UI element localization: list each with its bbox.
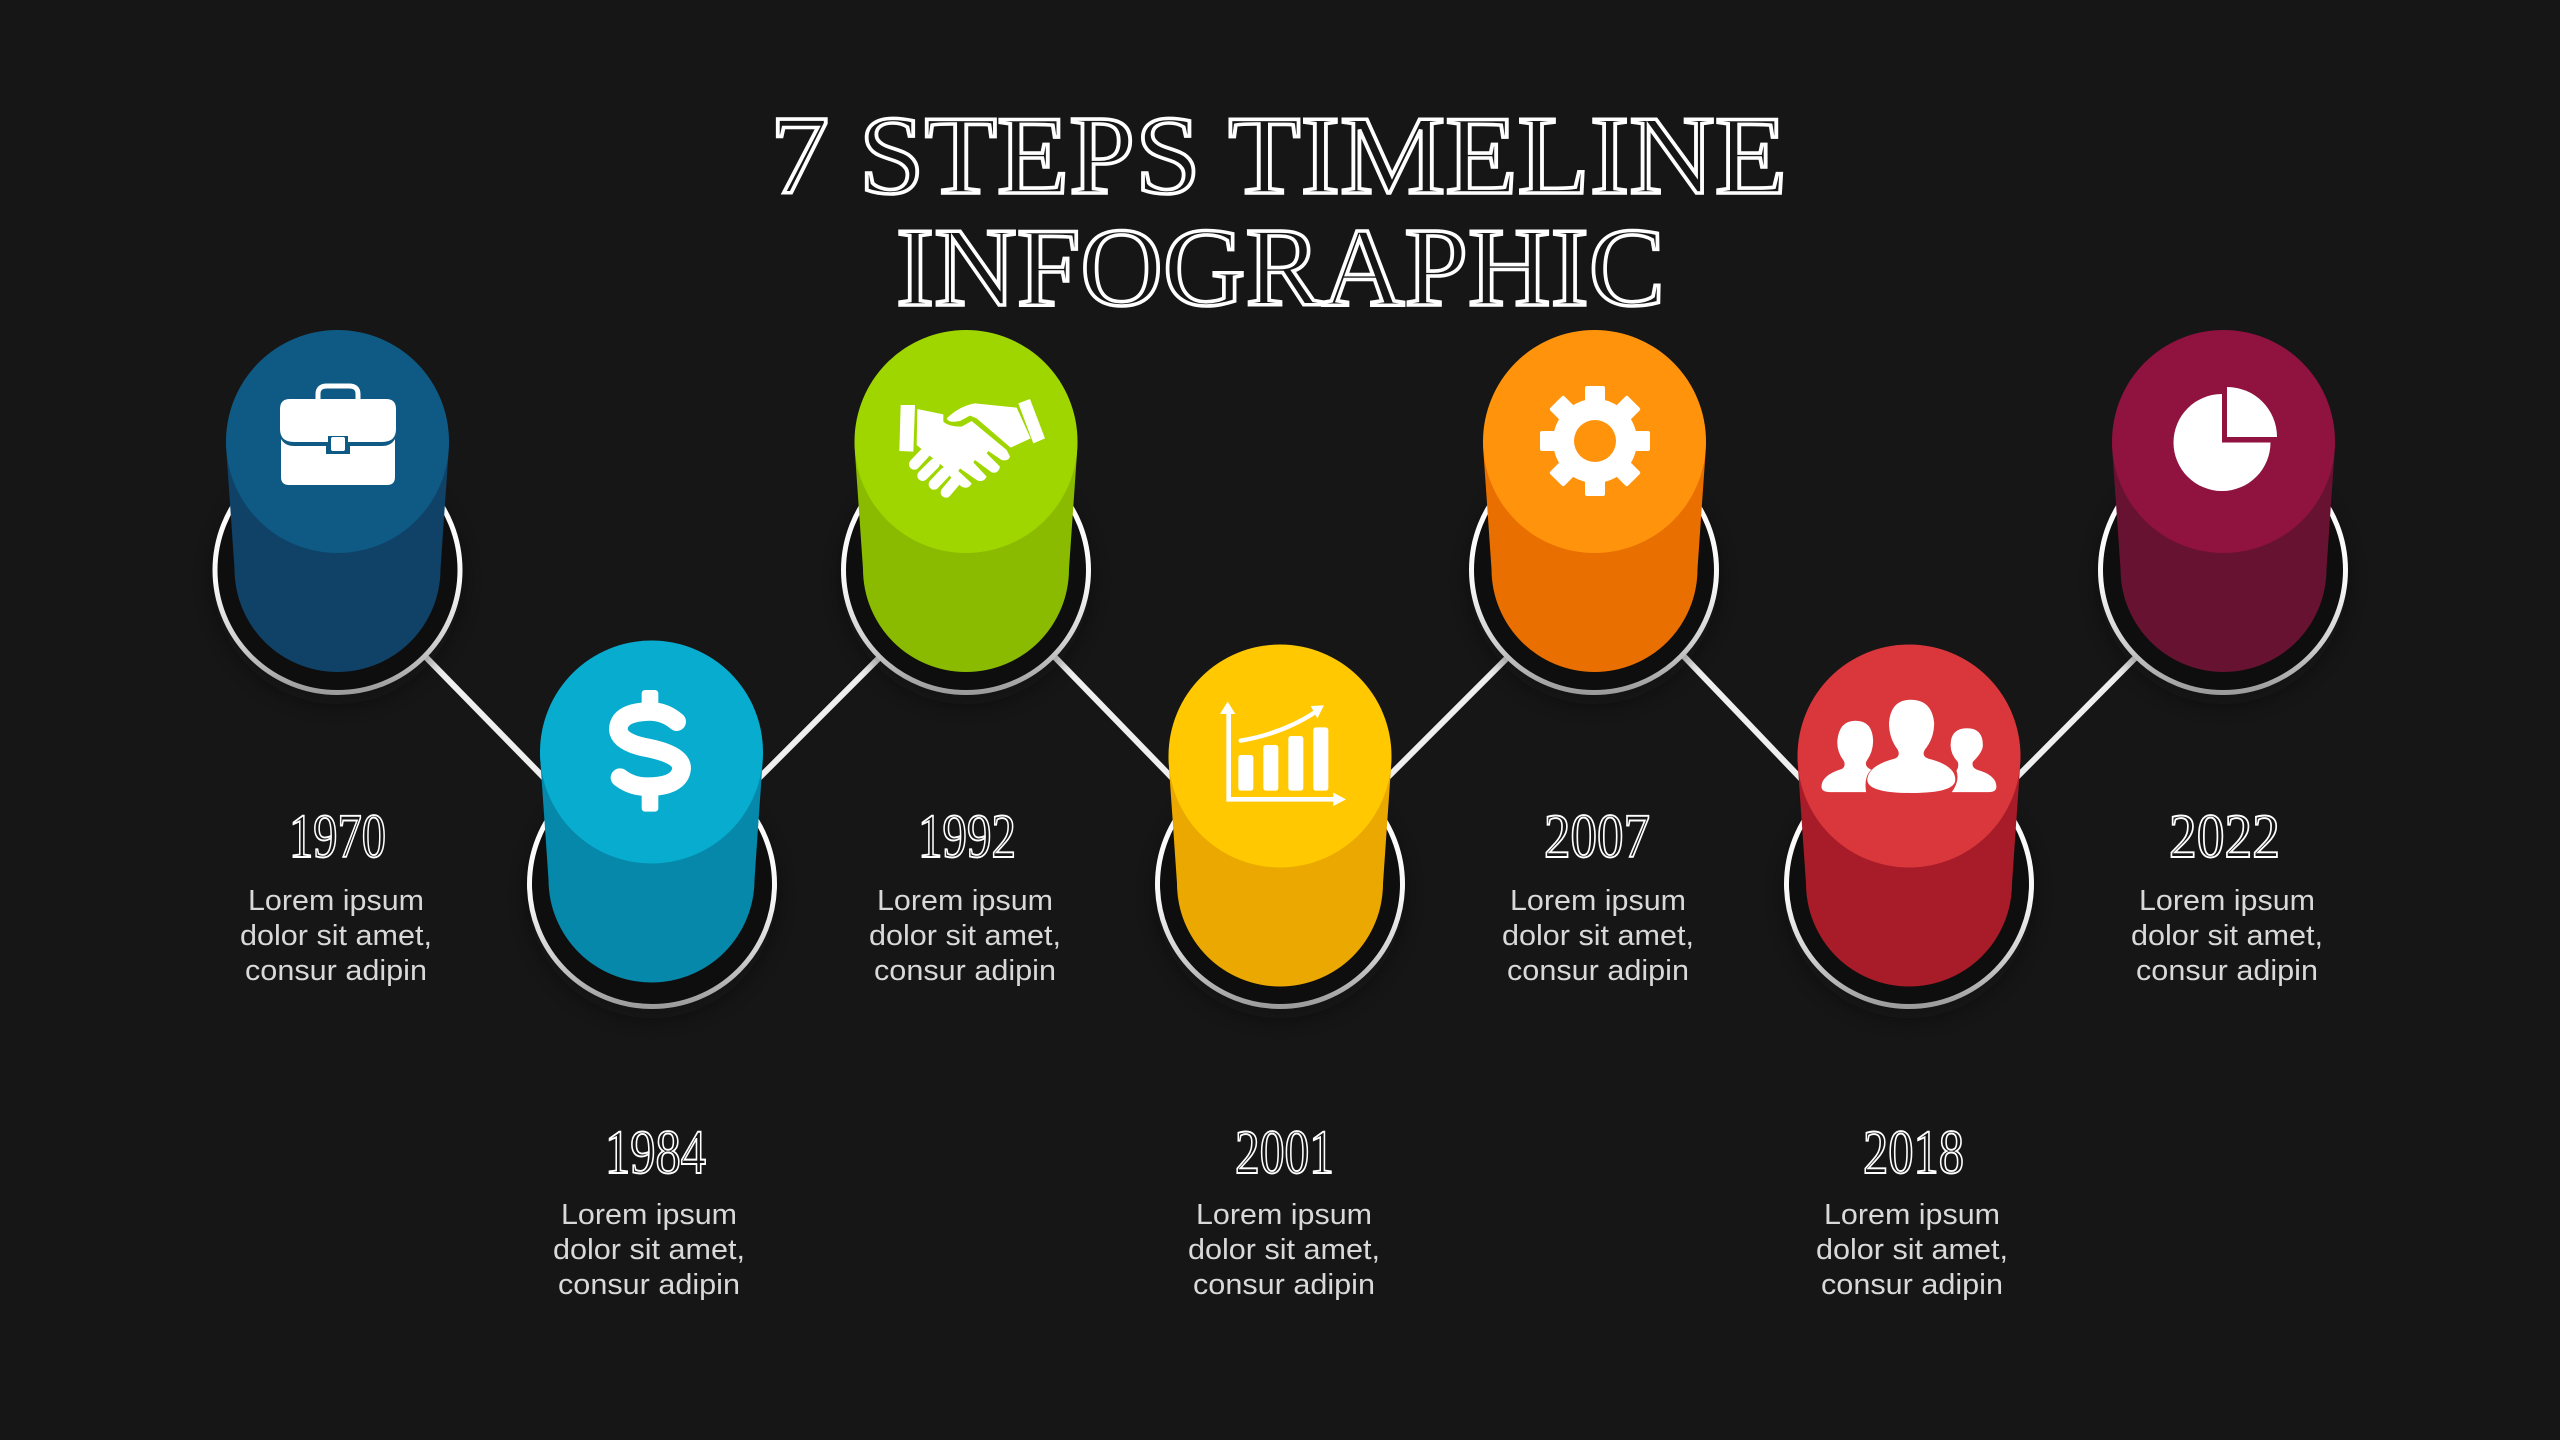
cylinder cap 2	[540, 640, 763, 864]
icon: pie chart	[2173, 387, 2277, 491]
year 1970: 1970	[289, 803, 386, 871]
year 1984: 1984	[605, 1119, 706, 1187]
description 7	[2131, 885, 2323, 987]
cylinder body 1	[226, 442, 449, 672]
base ring 2	[528, 762, 776, 1018]
step 7: 2022	[2099, 330, 2347, 987]
description 6	[1816, 1199, 2008, 1301]
title	[770, 94, 1787, 330]
description 3	[869, 885, 1061, 987]
step 1: 1970	[214, 330, 462, 987]
description 1	[240, 885, 432, 987]
icon: people	[1821, 700, 1996, 793]
step 6: 2018	[1785, 644, 2033, 1301]
description 7: Lorem ipsum	[2139, 885, 2315, 917]
cylinder cap 6	[1798, 644, 2020, 868]
base ring 6	[1785, 762, 2033, 1018]
cylinder body 5	[1483, 442, 1706, 672]
description 5: Lorem ipsum	[1510, 885, 1686, 917]
description 4: Lorem ipsum	[1196, 1199, 1372, 1231]
description 2: dolor sit amet,	[553, 1234, 745, 1266]
description 3: consur adipin	[874, 955, 1056, 987]
step 4: 2001	[1156, 644, 1404, 1301]
description 5: dolor sit amet,	[1502, 920, 1694, 952]
cylinder cap 4	[1168, 644, 1392, 868]
description 1: consur adipin	[245, 955, 427, 987]
description 1: Lorem ipsum	[248, 885, 424, 917]
description 2	[553, 1199, 745, 1301]
description 2: consur adipin	[558, 1269, 740, 1301]
connector lines	[415, 646, 2145, 786]
description 5: consur adipin	[1507, 955, 1689, 987]
base ring 5	[1470, 448, 1718, 704]
icon: dollar sign	[618, 690, 682, 812]
base ring 3	[842, 448, 1090, 704]
description 7: consur adipin	[2136, 955, 2318, 987]
year 2001: 2001	[1235, 1119, 1334, 1187]
base ring 1	[214, 448, 462, 704]
cylinder body 7	[2112, 442, 2335, 672]
cylinder body 4	[1168, 756, 1392, 986]
title: 7 STEPS TIMELINE	[770, 94, 1787, 218]
cylinder cap 3	[854, 330, 1078, 553]
icon: bar chart	[1220, 702, 1346, 806]
year 2007: 2007	[1544, 803, 1650, 871]
year 1992: 1992	[918, 803, 1016, 871]
description 3: dolor sit amet,	[869, 920, 1061, 952]
year 2018: 2018	[1863, 1119, 1964, 1187]
year 2022: 2022	[2169, 803, 2280, 871]
base ring 7	[2099, 448, 2347, 704]
cylinder body 2	[540, 752, 763, 982]
icon: briefcase	[280, 386, 396, 485]
description 4	[1188, 1199, 1380, 1301]
description 4: consur adipin	[1193, 1269, 1375, 1301]
cylinder cap 7	[2112, 330, 2335, 553]
cylinder body 6	[1798, 756, 2020, 986]
title: INFOGRAPHIC	[896, 206, 1665, 330]
step 5: 2007	[1470, 330, 1718, 987]
cylinder cap 1	[226, 330, 449, 553]
step 3: 1992	[842, 330, 1090, 987]
cylinder body 3	[854, 442, 1078, 672]
description 6: consur adipin	[1821, 1269, 2003, 1301]
description 4: dolor sit amet,	[1188, 1234, 1380, 1266]
description 5	[1502, 885, 1694, 987]
description 2: Lorem ipsum	[561, 1199, 737, 1231]
base ring 4	[1156, 762, 1404, 1018]
description 7: dolor sit amet,	[2131, 920, 2323, 952]
description 6: dolor sit amet,	[1816, 1234, 2008, 1266]
step 2: 1984	[528, 640, 776, 1301]
cylinder cap 5	[1483, 330, 1706, 553]
description 1: dolor sit amet,	[240, 920, 432, 952]
icon: gear	[1540, 386, 1650, 496]
description 6: Lorem ipsum	[1824, 1199, 2000, 1231]
icon: handshake	[899, 399, 1045, 492]
description 3: Lorem ipsum	[877, 885, 1053, 917]
